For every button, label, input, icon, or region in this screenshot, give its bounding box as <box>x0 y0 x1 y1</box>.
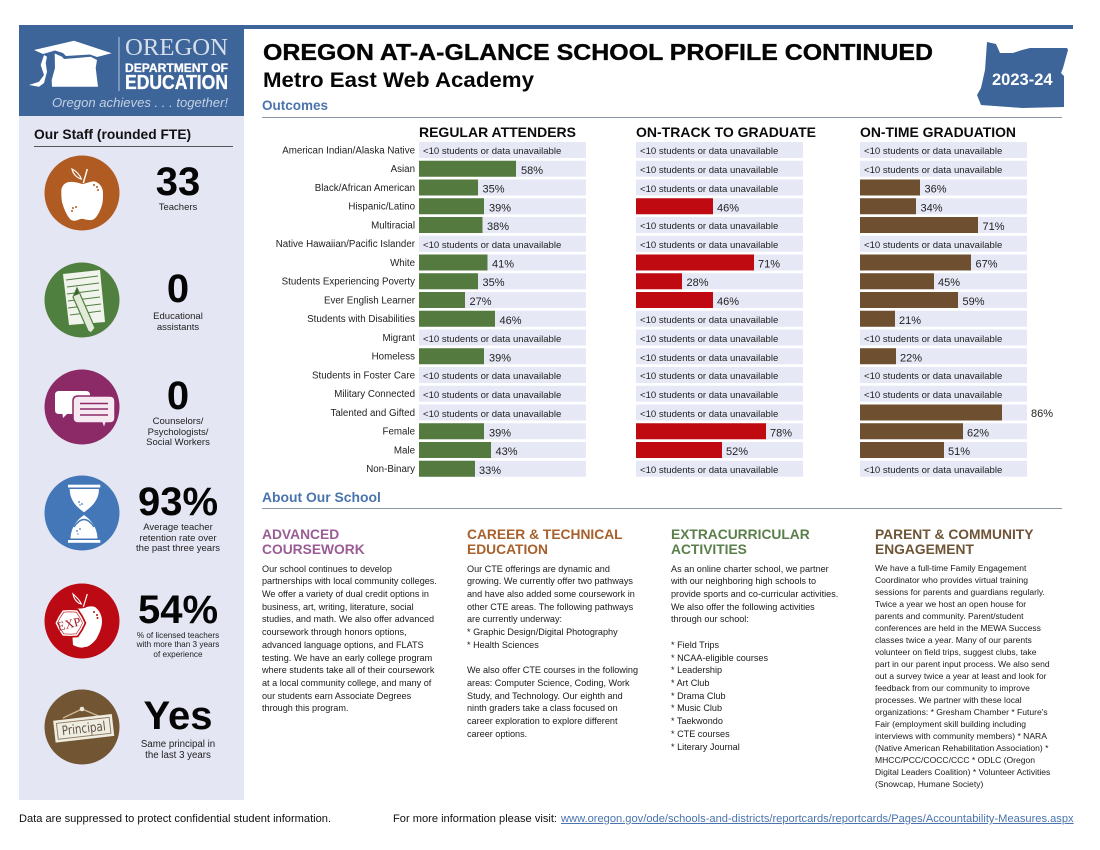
text: Career & Technical Education: Study, and Technology. Our eighth and <box>467 691 623 701</box>
heading: Extracurricular Activities: EXTRACURRICULAR <box>671 527 810 542</box>
icon: principal sign <box>44 690 120 764</box>
stat label: retention rate: the past three years <box>136 543 220 554</box>
text: Parent & Community Engagement: organizations: * Gresham Chamber * Future's <box>875 706 1048 716</box>
text: Extracurricular Activities: through our school: <box>671 614 749 624</box>
student group labels: Students with Disabilities <box>307 314 415 325</box>
text: Extracurricular Activities: As an online charter school, we partner <box>671 564 829 574</box>
column: on-track to graduate: 28% <box>686 277 709 289</box>
column: on-track to graduate: <10 students or data unavailable <box>640 240 778 251</box>
column: on-time graduation: 36% <box>924 184 947 196</box>
stat label: experienced teachers: % of licensed teachers <box>137 630 219 640</box>
sidebar heading: Our Staff: Our Staff (rounded FTE) <box>34 127 191 142</box>
student group labels: Multiracial <box>371 220 415 232</box>
column: on-time graduation: 45% <box>938 277 960 289</box>
column: regular attenders: <10 students or data unavailable <box>423 240 561 251</box>
column: regular attenders: <10 students or data unavailable <box>423 146 561 157</box>
text: Extracurricular Activities: with our neighboring high schools to <box>671 576 816 586</box>
icon: speech bubbles <box>44 370 120 444</box>
text: Parent & Community Engagement: volunteer on field trips, suggest clubs, take <box>875 646 1037 656</box>
stat: educational assistants count: 0 <box>167 267 189 311</box>
text: Parent & Community Engagement: classes twice a year. Many of our parents <box>875 634 1032 644</box>
heading: Outcomes: Outcomes <box>262 98 328 113</box>
text: Career & Technical Education: * Graphic Design/Digital Photography <box>467 627 618 637</box>
stat label: retention rate: retention rate over <box>139 533 217 544</box>
text: Parent & Community Engagement: MHCC/PCC/COCC/CCC * ODLC (Oregon <box>875 754 1035 764</box>
logo: Oregon Department of Education: DEPARTMENT OF <box>125 61 228 75</box>
text: Extracurricular Activities: * NCAA-eligible courses <box>671 653 768 663</box>
text: Extracurricular Activities: * Art Club <box>671 678 709 688</box>
column: on-track to graduate: <10 students or data unavailable <box>640 353 778 364</box>
text: Parent & Community Engagement: Coordinator who provides virtual training <box>875 574 1028 584</box>
stat: experienced teachers: 54% <box>138 588 218 632</box>
text: Parent & Community Engagement: We have a full-time Family Engagement <box>875 562 1026 572</box>
column: regular attenders: 27% <box>470 296 492 308</box>
text: Advanced Coursework: where students take all of their coursework <box>262 665 434 675</box>
student group labels: Homeless <box>372 352 415 363</box>
heading: About Our School: About Our School <box>262 489 381 505</box>
column: on-time graduation: <10 students or data unavailable <box>864 390 1002 401</box>
column: on-track to graduate: 52% <box>726 446 748 458</box>
stat label: experienced teachers: with more than 3 years <box>137 640 219 649</box>
icon: bitten apple with EXP <box>44 584 120 658</box>
text: Career & Technical Education <box>467 564 638 739</box>
stat: counselors count: 0 <box>167 374 189 418</box>
text: Advanced Coursework: partnerships with local community colleges. <box>262 576 437 586</box>
stat: retention rate: 93% <box>138 480 218 524</box>
column: on-track to graduate: <10 students or data unavailable <box>640 184 778 195</box>
text: Parent & Community Engagement: out a survey twice a year at least and look for <box>875 670 1047 680</box>
column: on-time graduation: 34% <box>920 202 943 214</box>
stat label: counselors: Social Workers <box>146 437 210 448</box>
icon: apple <box>44 156 120 230</box>
column: on-track to graduate: 46% <box>717 296 739 308</box>
top rule <box>19 25 1073 29</box>
stat label: educational assistants: assistants <box>157 322 199 332</box>
student group labels: Migrant <box>382 333 415 344</box>
column: regular attenders: <10 students or data unavailable <box>423 409 561 420</box>
stat label: retention rate: Average teacher <box>143 522 213 533</box>
text: Parent & Community Engagement: processes. We partner with these local <box>875 694 1022 704</box>
column: on-time graduation: 21% <box>899 315 921 327</box>
student group labels: Students in Foster Care <box>312 370 415 382</box>
footer link: www.oregon.gov/ode/schools-and-districts/reportcards/reportcards/Pages/Accountability-Measures.aspx <box>561 813 1074 825</box>
text: Advanced Coursework: through this program. <box>262 703 348 713</box>
icon: paper and pencil <box>44 262 120 338</box>
text: Parent & Community Engagement: interviews with community members) * NARA <box>875 730 1047 740</box>
text: Career & Technical Education: ninth graders take a class focused on <box>467 703 618 713</box>
column: on-track to graduate: <10 students or data unavailable <box>640 390 778 401</box>
text: Extracurricular Activities: * Field Trips <box>671 640 719 650</box>
heading: Extracurricular Activities: ACTIVITIES <box>671 542 747 557</box>
text: Advanced Coursework: advanced language options, and FLATS <box>262 640 424 650</box>
column: on-track to graduate: <10 students or data unavailable <box>640 371 778 382</box>
column: on-time graduation: ON-TIME GRADUATION <box>860 124 1016 140</box>
text: Advanced Coursework: We offer a variety of dual credit options in <box>262 589 429 599</box>
column: on-track to graduate: <10 students or data unavailable <box>640 146 778 157</box>
column: on-track to graduate: <10 students or data unavailable <box>640 409 778 420</box>
stat label: experienced teachers <box>136 630 220 659</box>
column: regular attenders: 43% <box>496 446 518 458</box>
text: Parent & Community Engagement: (Native American Rehabilitation Association) * <box>875 742 1048 752</box>
heading: Extracurricular Activities <box>671 527 810 557</box>
text: Advanced Coursework: at a local community college, and many of <box>262 678 431 688</box>
stat label: counselors: Counselors/ <box>153 416 203 427</box>
badge: Oregon state shape with year: 2023-24 <box>992 71 1053 89</box>
column: regular attenders: 35% <box>482 184 505 196</box>
logo: Oregon Department of Education: EDUCATION <box>125 72 228 94</box>
text: Advanced Coursework: Our school continues to develop <box>262 564 392 574</box>
column: on-track to graduate: <10 students or data unavailable <box>640 165 778 176</box>
column: on-time graduation: <10 students or data unavailable <box>864 165 1002 176</box>
student group labels: Female <box>382 427 415 438</box>
text: Parent & Community Engagement: Fair (employment skill building including <box>875 718 1026 728</box>
footer note: Data are suppressed to protect confidential student information. <box>19 813 331 825</box>
column: on-time graduation: 71% <box>982 221 1005 233</box>
student group labels: Native Hawaiian/Pacific Islander <box>276 239 416 250</box>
column: on-track to graduate: <10 students or data unavailable <box>640 221 778 232</box>
column: regular attenders: 41% <box>492 258 514 270</box>
column: regular attenders: 39% <box>489 202 511 214</box>
text: Extracurricular Activities: * Literary Journal <box>671 742 740 752</box>
student group labels: Talented and Gifted <box>330 408 415 419</box>
text: Extracurricular Activities: * Leadership <box>671 665 722 675</box>
sidebar panel <box>19 116 244 800</box>
column: regular attenders: 38% <box>487 221 509 233</box>
sidebar heading: Our Staff <box>34 127 233 147</box>
column: regular attenders: 33% <box>479 465 501 477</box>
column: regular attenders: 35% <box>482 277 505 289</box>
stat label: same principal: Same principal in <box>141 738 215 750</box>
badge: Oregon state shape with year <box>977 42 1068 108</box>
column: regular attenders: <10 students or data unavailable <box>423 334 561 345</box>
column: regular attenders: 58% <box>521 165 543 177</box>
heading: Career & Technical Education: CAREER & TECHNICAL <box>467 527 623 542</box>
column: on-time graduation: <10 students or data unavailable <box>864 371 1002 382</box>
text: Extracurricular Activities: provide sports and co-curricular activities. <box>671 589 838 599</box>
text: Extracurricular Activities <box>671 564 838 752</box>
stat label: retention rate <box>136 522 220 554</box>
text: Career & Technical Education: growing. We currently offer two pathways <box>467 576 633 586</box>
column: on-time graduation <box>860 124 1053 477</box>
title <box>263 39 933 92</box>
text: Extracurricular Activities: * Taekwondo <box>671 716 723 726</box>
text: Advanced Coursework: our students earn Associate Degrees <box>262 691 411 701</box>
text: Career & Technical Education: other CTE areas. The following pathways <box>467 602 633 612</box>
text: Parent & Community Engagement: conferences are held in the MEWA Success <box>875 622 1041 632</box>
text: Career & Technical Education: Our CTE offerings are dynamic and <box>467 564 610 574</box>
student group labels <box>276 146 416 475</box>
stat label: teachers: Teachers <box>159 202 197 213</box>
text: Extracurricular Activities: * Drama Club <box>671 691 726 701</box>
text: Career & Technical Education: are currently underway: <box>467 614 562 624</box>
text: Career & Technical Education: We also offer CTE courses in the following <box>467 665 638 675</box>
column: on-time graduation: <10 students or data unavailable <box>864 240 1002 251</box>
column: on-track to graduate: 46% <box>717 202 739 214</box>
icon: bitten apple with EXP: EXP <box>56 614 82 634</box>
column: on-track to graduate: ON-TRACK TO GRADUATE <box>636 124 816 140</box>
icon: principal sign: Principal <box>61 719 107 739</box>
student group labels: Hispanic/Latino <box>348 202 416 213</box>
text: Advanced Coursework: business, art, writing, literature, social <box>262 602 414 612</box>
column: regular attenders: <10 students or data unavailable <box>423 371 561 382</box>
stat label: educational assistants <box>153 310 203 332</box>
student group labels: Students Experiencing Poverty <box>282 277 415 288</box>
column: on-time graduation: 22% <box>900 352 922 364</box>
student group labels: American Indian/Alaska Native <box>282 146 415 156</box>
text: Parent & Community Engagement: (Snowcap, Humane Society) <box>875 778 983 788</box>
heading: Advanced Coursework: COURSEWORK <box>262 542 365 557</box>
heading: Parent & Community Engagement: ENGAGEMENT <box>875 542 974 557</box>
heading: Parent & Community Engagement: PARENT & COMMUNITY <box>875 527 1033 542</box>
heading: Career & Technical Education <box>467 527 623 557</box>
text: Extracurricular Activities: We also offer the following activities <box>671 602 815 612</box>
text: Career & Technical Education: and have also added some coursework in <box>467 589 635 599</box>
text: Advanced Coursework: coursework through honors options, <box>262 627 407 637</box>
text: Extracurricular Activities: * CTE courses <box>671 729 730 739</box>
text: Parent & Community Engagement: feedback from our community to improve <box>875 682 1030 692</box>
stat label: same principal: the last 3 years <box>145 750 211 760</box>
title: Metro East Web Academy <box>263 69 534 92</box>
heading: Advanced Coursework: ADVANCED <box>262 527 339 542</box>
text: Advanced Coursework <box>262 564 437 713</box>
stat: teachers count: 33 <box>156 160 200 204</box>
column: on-track to graduate: <10 students or data unavailable <box>640 465 778 476</box>
column: on-time graduation: <10 students or data unavailable <box>864 465 1002 476</box>
text: Parent & Community Engagement: Digital Leaders Coalition) * Volunteer Activities <box>875 766 1050 776</box>
text: Career & Technical Education: * Health Sciences <box>467 640 539 650</box>
column: on-time graduation: 67% <box>976 258 998 270</box>
column: on-track to graduate <box>636 124 816 477</box>
heading: Career & Technical Education: EDUCATION <box>467 542 548 557</box>
stat label: counselors: Psychologists/ <box>148 426 208 438</box>
logo: Oregon Department of Education <box>19 29 244 116</box>
column: on-track to graduate: 71% <box>758 258 780 270</box>
text: Career & Technical Education: career options. <box>467 729 527 739</box>
column: on-track to graduate: <10 students or data unavailable <box>640 315 778 326</box>
column: regular attenders: <10 students or data unavailable <box>423 390 561 401</box>
logo: Oregon Department of Education: OREGON <box>125 35 228 61</box>
text: Parent & Community Engagement: parents and community. Parent/student <box>875 610 1024 620</box>
heading: Parent & Community Engagement <box>875 527 1034 557</box>
column: regular attenders: 39% <box>489 428 511 440</box>
student group labels: Black/African American <box>315 183 415 194</box>
text: Parent & Community Engagement: part in our parent input process. We also send <box>875 658 1050 668</box>
column: on-time graduation: 59% <box>962 296 985 308</box>
stat label: educational assistants: Educational <box>153 310 203 322</box>
column: on-time graduation: 51% <box>948 446 970 458</box>
student group labels: Military Connected <box>334 389 415 400</box>
column: regular attenders: 39% <box>489 352 511 364</box>
column: on-track to graduate: 78% <box>770 428 792 440</box>
text: Advanced Coursework: testing. We have an early college program <box>262 653 432 663</box>
column: on-time graduation: <10 students or data unavailable <box>864 146 1002 157</box>
text: Parent & Community Engagement: sessions for parents and guardians regularly. <box>875 586 1045 596</box>
student group labels: Ever English Learner <box>324 296 416 306</box>
column: regular attenders <box>419 124 586 477</box>
text: Parent & Community Engagement <box>875 562 1050 788</box>
stat label: counselors <box>146 416 210 448</box>
column: regular attenders: 46% <box>500 315 522 327</box>
column: on-time graduation: <10 students or data unavailable <box>864 334 1002 345</box>
heading: Advanced Coursework <box>262 527 365 557</box>
column: on-time graduation: 62% <box>967 428 989 440</box>
student group labels: Asian <box>391 164 415 175</box>
footer link: For more information please visit: <box>393 813 557 825</box>
stat: same principal: Yes <box>144 694 212 738</box>
column: regular attenders: REGULAR ATTENDERS <box>419 124 576 140</box>
stat label: same principal <box>141 738 215 760</box>
title: OREGON AT-A-GLANCE SCHOOL PROFILE CONTINUED <box>263 39 933 65</box>
column: on-time graduation: 86% <box>1031 408 1053 420</box>
text: Career & Technical Education: career exploration to explore different <box>467 716 617 726</box>
text: Parent & Community Engagement: Twice a year we host an open house for <box>875 598 1026 608</box>
text: Advanced Coursework: studies, and math. We also offer advanced <box>262 614 434 624</box>
column: on-track to graduate: <10 students or data unavailable <box>640 334 778 345</box>
student group labels: White <box>390 258 415 269</box>
icon: hourglass <box>44 476 120 550</box>
student group labels: Male <box>394 446 415 456</box>
chart: outcomes bars <box>276 124 1053 477</box>
student group labels: Non-Binary <box>366 464 415 475</box>
stat label: experienced teachers: of experience <box>153 650 203 659</box>
text: Extracurricular Activities: * Music Club <box>671 703 722 713</box>
logo: Oregon Department of Education: Oregon achieves . . . together! <box>52 95 228 110</box>
text: Career & Technical Education: areas: Computer Science, Coding, Work <box>467 678 630 688</box>
